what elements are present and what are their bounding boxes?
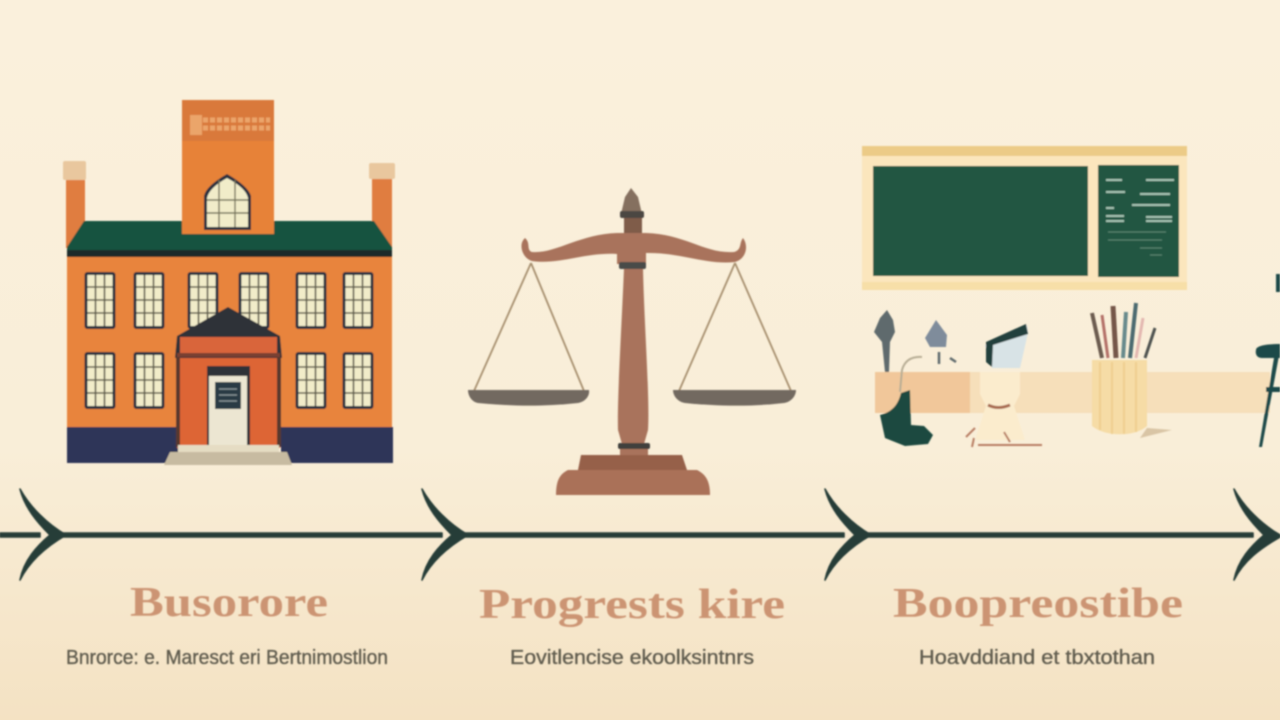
- steps: [164, 445, 292, 465]
- caption: stage 1: Bnrorce: e. Maresct eri Bertnimostlion: [66, 647, 388, 669]
- navy base: [67, 427, 393, 463]
- main board: [873, 166, 1088, 276]
- timeline arrow: [0, 489, 1280, 580]
- icon: easel at right edge: [1256, 274, 1280, 447]
- heading: stage 3: Boopreostibe: [893, 581, 1183, 627]
- chevron 2: [422, 489, 468, 580]
- side board: [1098, 165, 1179, 277]
- board frame: [862, 146, 1187, 290]
- chevron 3: [825, 489, 871, 580]
- icon: classroom blackboard: [862, 146, 1187, 290]
- shelf band: [875, 372, 1270, 413]
- lamp: [966, 324, 1042, 447]
- chimneys: [63, 161, 395, 248]
- tool left: [874, 310, 933, 446]
- caption: stage 2: Eovitlencise ekoolksintnrs: [510, 647, 754, 669]
- left pan: [468, 263, 589, 406]
- right pan: [673, 263, 796, 406]
- chevron 4: [1234, 489, 1280, 580]
- icon: school building: [63, 100, 395, 465]
- caption: stage 3: Hoavddiand et tbxtothan: [919, 647, 1155, 669]
- base: [556, 455, 710, 495]
- finial: [620, 188, 644, 234]
- heading: stage 1: Busorore: [130, 580, 328, 626]
- green roof: [67, 221, 392, 257]
- chevron 1: [20, 489, 66, 580]
- tower: [182, 100, 274, 234]
- crossbeam: [521, 233, 746, 264]
- windows: [84, 272, 374, 409]
- heading: stage 2: Progrests kire: [479, 582, 785, 628]
- pencil jar: [1092, 303, 1172, 438]
- pillar: [618, 262, 650, 456]
- top rail: [862, 146, 1187, 156]
- icon: balance scale: [468, 188, 796, 495]
- brick facade: [67, 257, 392, 427]
- icon: desk items: [874, 303, 1172, 447]
- entrance porch: [175, 307, 282, 448]
- small figure: [925, 320, 956, 364]
